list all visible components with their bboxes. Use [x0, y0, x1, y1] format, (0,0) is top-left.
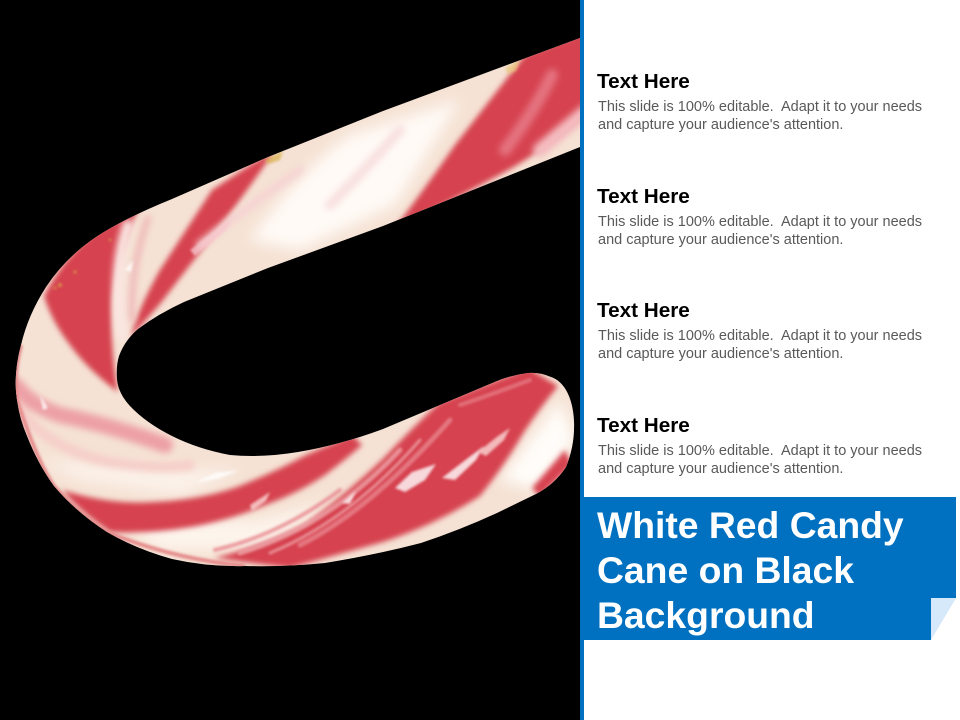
text block 3 — [597, 299, 922, 362]
body text 4: This slide is 100% editable. Adapt it to your needs — [598, 443, 922, 459]
blue vertical divider — [580, 0, 584, 720]
red stripes — [44, 30, 590, 568]
text block 1 — [597, 70, 922, 133]
body text 4 — [598, 443, 922, 477]
title: Cane on Black — [597, 549, 854, 591]
heading 3: Text Here — [597, 299, 690, 322]
photo panel: candy cane on black background — [0, 0, 580, 720]
heading 4: Text Here — [597, 414, 690, 437]
text block 4 — [597, 414, 922, 477]
body text 4: and capture your audience's attention. — [598, 461, 843, 477]
title banner with folded corner — [584, 497, 956, 640]
glossy highlights — [40, 218, 510, 511]
title: Background — [597, 594, 815, 636]
heading 1: Text Here — [597, 70, 690, 93]
body text 3: This slide is 100% editable. Adapt it to your needs — [598, 328, 922, 344]
pale pink swirl across the bend — [15, 75, 585, 467]
body text 2: This slide is 100% editable. Adapt it to your needs — [598, 214, 922, 230]
body text 3 — [598, 328, 922, 362]
body text 1: and capture your audience's attention. — [598, 117, 843, 133]
heading 2: Text Here — [597, 185, 690, 208]
body text 1 — [598, 99, 922, 133]
title: White Red Candy — [597, 504, 904, 546]
body text 3: and capture your audience's attention. — [598, 346, 843, 362]
body text 2: and capture your audience's attention. — [598, 232, 843, 248]
title — [597, 504, 904, 636]
body text 2 — [598, 214, 922, 248]
pink streaks on the hook end — [215, 380, 530, 553]
text block 2 — [597, 185, 922, 248]
white stripes on the shaft — [40, 100, 575, 550]
body text 1: This slide is 100% editable. Adapt it to your needs — [598, 99, 922, 115]
outer edge tint — [16, 345, 245, 566]
gold flecks — [54, 60, 520, 289]
candy cane — [16, 38, 580, 566]
